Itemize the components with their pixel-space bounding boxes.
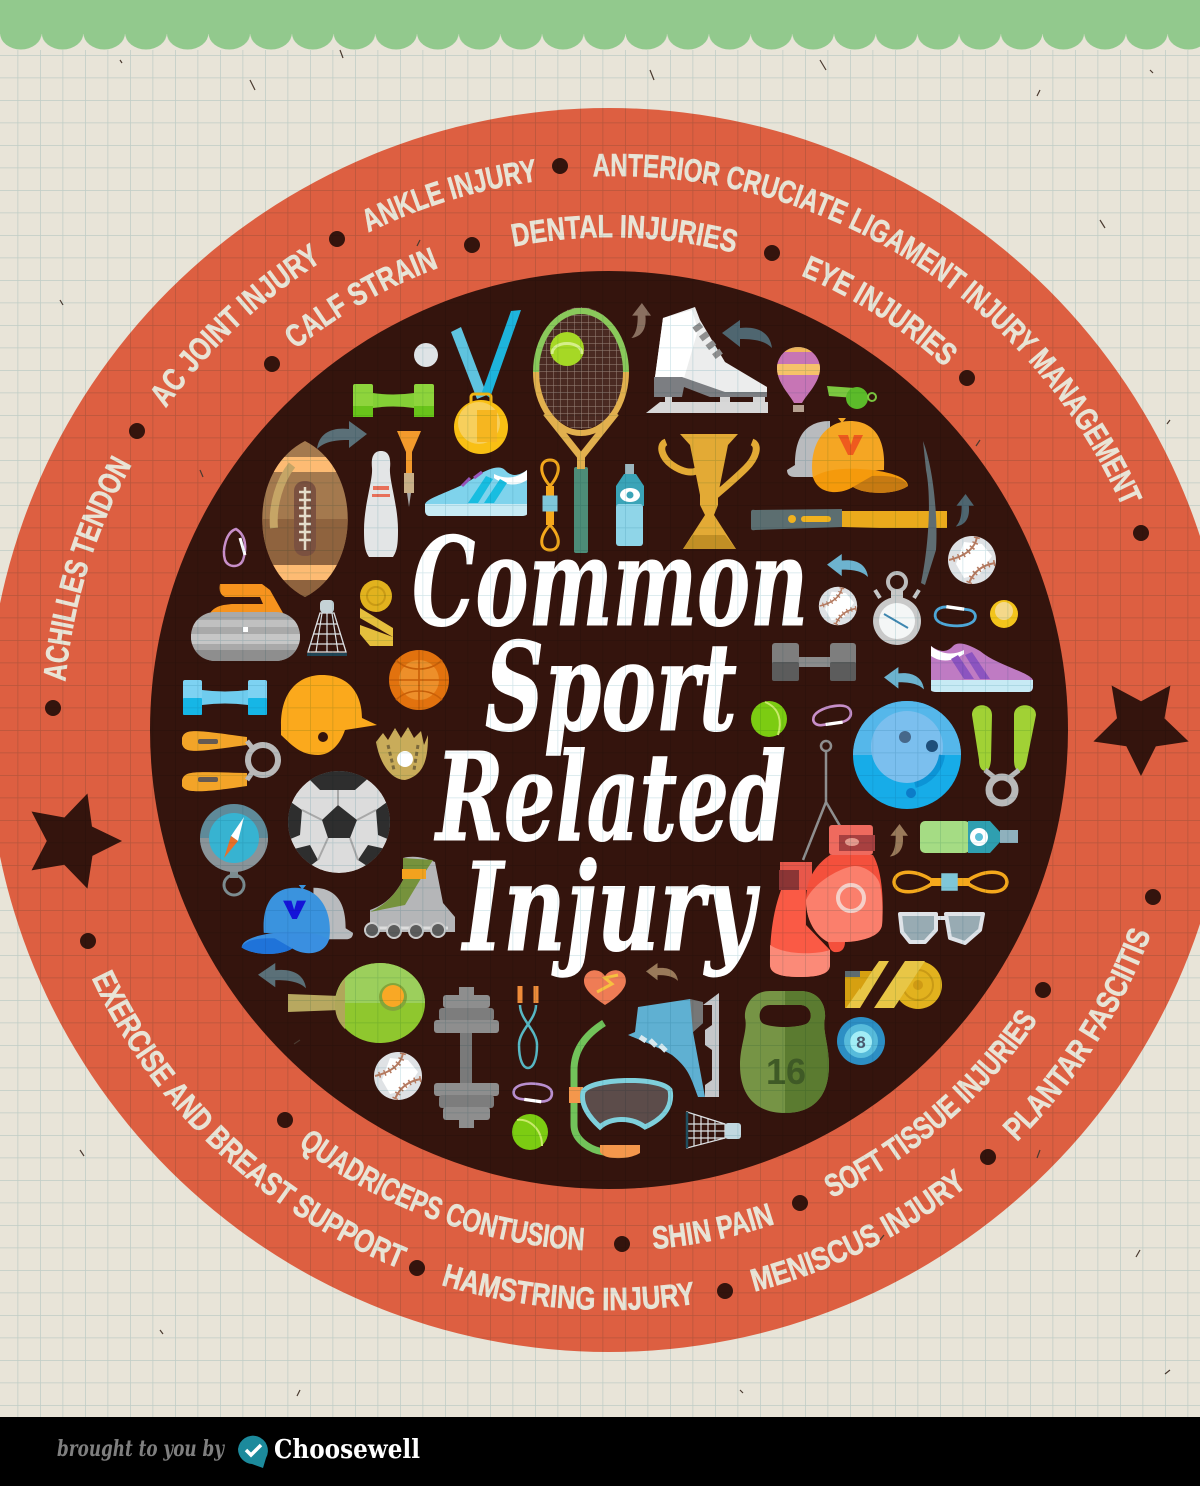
arrow [890,824,908,856]
label: anterior cruciate ligament: ANTERIOR CRUCIATE LIGAMENT INJURY MANAGEMENT [593,154,1143,502]
star right [1079,658,1200,787]
icon: snorkel and mask [569,1023,671,1158]
icon: ice pick [921,441,936,585]
icon: white ball [414,343,438,367]
icon: orange skipping rope coil [894,872,1007,892]
icon: baseball small [819,587,857,625]
star left [14,779,133,894]
arrow [884,667,924,689]
icon: baseball [948,536,996,584]
icon: 8 ball: 8 [856,1033,866,1052]
icon: green hand gripper [972,705,1036,803]
icon: gold medal [451,310,521,454]
icon: ping pong paddle [288,963,425,1043]
icon: trophy [662,434,756,549]
footer bar: brought to you by [57,1436,226,1462]
label: hamstring injury: HAMSTRING INJURY [442,1264,693,1310]
icon: orange cap [787,418,908,493]
label: plantar fasciitis: PLANTAR FASCIITIS [1002,928,1150,1142]
icon: jump rope [519,986,537,1068]
icon: tennis ball [751,701,787,737]
icon: bowling pin [364,451,398,557]
title [412,510,808,979]
icon: sunglasses [900,914,983,943]
icon: shuttlecock [307,600,347,656]
icon: blue cap [242,885,353,954]
icon: purple carabiner [513,1081,553,1103]
title: Sport [485,615,737,759]
icon: yellow ball [990,600,1018,628]
label: AC joint injury: AC JOINT INJURY [152,242,317,408]
icon: kettlebell [740,991,829,1113]
icon: horizontal shuttlecock [687,1112,741,1148]
arrow [317,421,367,449]
icon: baseball [374,1052,422,1100]
icon: blue carabiner [934,605,976,629]
icon: football [262,441,348,597]
icon: pink carabiner vertical [224,529,245,566]
icon: basketball [389,650,449,710]
arrow [956,494,974,526]
label: shin pain: SHIN PAIN [652,1203,774,1249]
footer bar [0,1417,1200,1486]
icon: white ice skate [646,307,768,413]
dark inner circle [150,271,1068,1189]
title: Common [412,510,808,654]
icon: blue water bottle [616,464,644,546]
ring separator dots [45,158,1161,1299]
icon: green bottle [920,821,1018,853]
icon: tennis racket [536,307,626,553]
label: exercise and breast support: EXERCISE AND BREAST SUPPORT [92,969,408,1267]
arrow [722,320,772,348]
arrow [827,554,868,577]
icon: green dumbbell [353,384,434,417]
icon: whistle [827,386,876,409]
label: quadriceps contusion: QUADRICEPS CONTUSION [302,1131,584,1250]
icon: boxing gloves [770,825,883,977]
icon: bag hanger [803,741,840,860]
icon: blue ice skate [628,993,719,1097]
icon: gray dumbbell [772,643,856,681]
icon: 8 ball [837,1017,885,1065]
arrow [646,963,678,981]
footer bar: Choosewell [274,1435,420,1465]
label: calf strain: CALF STRAIN [286,247,438,346]
icon: blue dumbbell [183,680,267,715]
icon: purple sneaker [931,644,1033,692]
icon: compass [200,804,268,895]
icon: stopwatch [873,573,921,645]
icon: orange hand gripper [182,731,278,791]
icon: tennis ball [512,1114,548,1150]
icon: inline skate [365,857,455,938]
icon: heart [584,970,626,1005]
label: soft tissue injuries: SOFT TISSUE INJURIES [824,1010,1036,1196]
icon: blue sneaker [425,468,527,516]
icon: barbell weight [434,987,499,1128]
label: meniscus injury: MENISCUS INJURY [750,1168,963,1292]
arrow [631,303,651,338]
label: dental injuries: DENTAL INJURIES [510,214,738,252]
icon: soccer ball [288,760,390,873]
icon: vertical rope [542,460,558,550]
arrow [258,963,306,988]
icon: tape measure small [360,580,393,646]
icon: dart [397,431,421,507]
icon: pink carabiner [812,704,852,726]
title: Related [434,725,786,869]
label: ankle injury: ANKLE INJURY [364,158,534,233]
icon: hot air balloon [777,347,820,412]
icon: curling stone [191,584,300,661]
icon: bowling ball [853,701,961,809]
icon: batting helmet [281,675,377,755]
icon: baseball glove [376,727,428,780]
title: Injury [461,835,760,979]
label: Achilles tendon: ACHILLES TENDON [44,455,132,682]
top scalloped band [0,0,1200,51]
label: eye injuries: EYE INJURIES [802,255,957,365]
icon: tape measure [845,961,942,1009]
icon: baseball bat [751,509,947,530]
icon: kettlebell: 16 [766,1051,806,1092]
